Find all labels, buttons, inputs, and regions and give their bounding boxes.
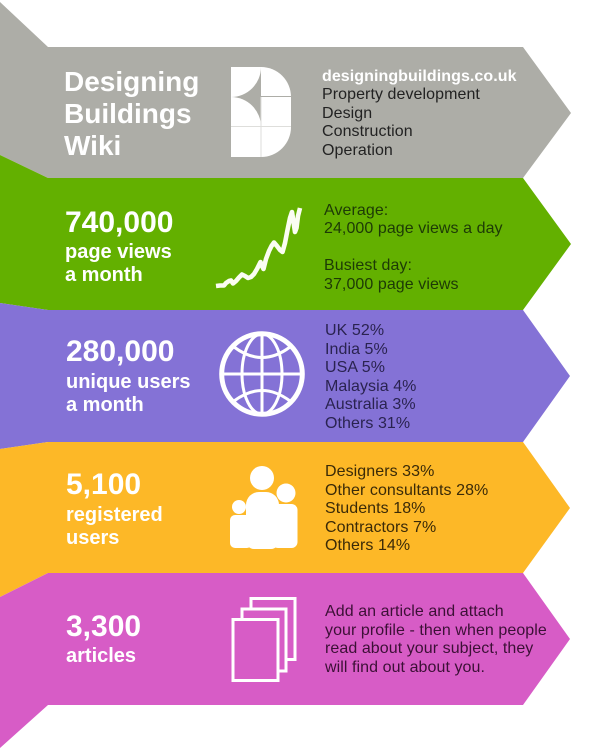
text: site and sectors: Design (322, 105, 372, 122)
text: average and busiest day: 24,000 page views a day (324, 220, 503, 237)
text: user types: Students 18% (325, 500, 425, 517)
text: call to action: read about your subject, they (325, 640, 533, 657)
heading: 740,000 page views: 740,000 (65, 206, 173, 239)
text: call to action: will find out about you. (324, 659, 485, 676)
icon: line chart (216, 208, 300, 286)
heading: 280,000 unique users: unique users (66, 371, 190, 393)
panel: Designing Buildings Wiki (0, 2, 571, 178)
text: user types (325, 463, 488, 554)
title: Wiki (64, 130, 121, 161)
text: countries (325, 322, 416, 432)
text: user types: Contractors 7% (325, 519, 436, 536)
text: countries: UK 52% (325, 322, 384, 339)
heading: 740,000 page views: a month (65, 264, 143, 286)
text: call to action (324, 603, 547, 676)
heading: 740,000 page views: page views (65, 241, 172, 263)
heading: 5,100 registered users (66, 468, 163, 549)
heading: 280,000 unique users (66, 335, 190, 416)
text: countries: Malaysia 4% (325, 378, 416, 395)
title (64, 66, 199, 161)
panel: page views (0, 155, 571, 310)
icon: people (230, 466, 298, 549)
panel: unique users (0, 303, 570, 449)
text: average and busiest day: Busiest day: (324, 257, 412, 274)
text: site and sectors: Construction (322, 123, 413, 140)
text: site and sectors: designingbuildings.co.uk (322, 68, 517, 85)
text: site and sectors: Operation (322, 142, 393, 159)
heading: 3,300 articles: 3,300 (66, 610, 141, 643)
text: user types: Others 14% (325, 537, 410, 554)
text: user types: Other consultants 28% (325, 482, 488, 499)
text: average and busiest day: Average: (324, 202, 388, 219)
icon: documents (233, 598, 295, 680)
icon: logo (231, 67, 291, 157)
text: site and sectors: Property development (322, 86, 480, 103)
text: average and busiest day (324, 202, 503, 293)
heading: 280,000 unique users: 280,000 (66, 335, 174, 368)
icon: globe (222, 334, 302, 414)
title: Designing (64, 66, 199, 97)
text: call to action: your profile - then when people (325, 622, 547, 639)
text: site and sectors (322, 68, 517, 159)
text: user types: Designers 33% (325, 463, 434, 480)
title: Buildings (64, 98, 192, 129)
text: countries: Others 31% (325, 415, 410, 432)
heading: 740,000 page views (65, 206, 173, 286)
text: countries: India 5% (325, 341, 388, 358)
heading: 5,100 registered users: users (66, 527, 119, 549)
panel: registered users (0, 442, 570, 597)
panel: articles (0, 573, 570, 748)
heading: 3,300 articles (66, 610, 141, 667)
heading: 280,000 unique users: a month (66, 394, 144, 416)
text: countries: Australia 3% (325, 396, 416, 413)
text: countries: USA 5% (325, 359, 385, 376)
text: call to action: Add an article and attach (325, 603, 504, 620)
text: average and busiest day: 37,000 page views (324, 276, 459, 293)
heading: 3,300 articles: articles (66, 645, 136, 667)
heading: 5,100 registered users: 5,100 (66, 468, 141, 501)
heading: 5,100 registered users: registered (66, 504, 163, 526)
